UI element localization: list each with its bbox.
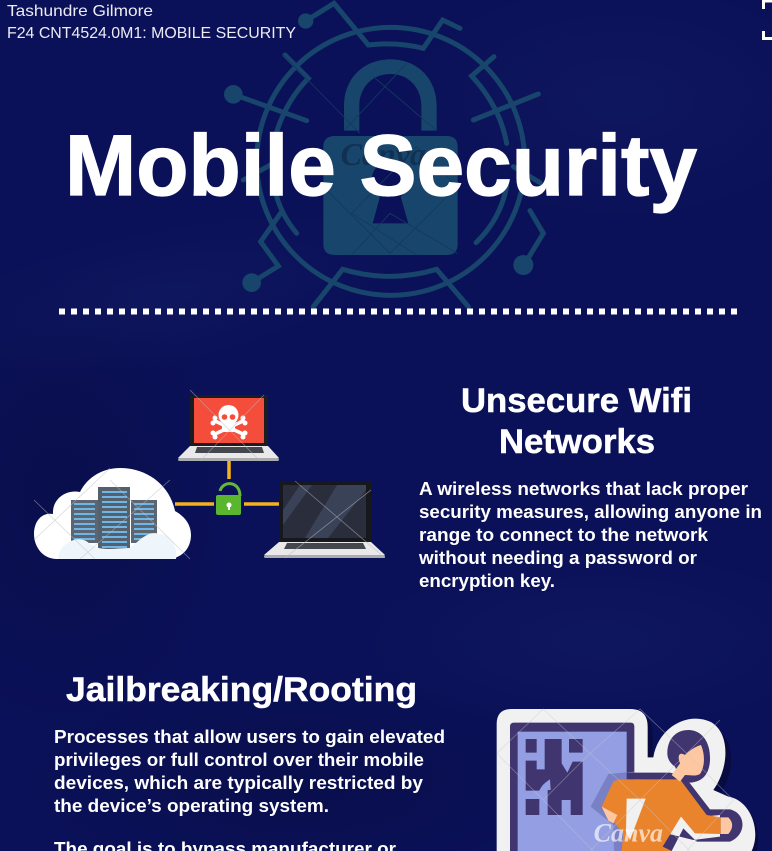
- heading: [461, 382, 692, 461]
- description: security measures, allowing anyone in: [419, 502, 762, 522]
- emblem circuit lines: [233, 3, 543, 307]
- title: Mobile Security: [65, 118, 697, 214]
- network illustration: [34, 390, 385, 559]
- paper in hand: [626, 799, 646, 840]
- watermark: Canva: Canva: [594, 819, 663, 848]
- jailbreak sticker illustration: [497, 709, 758, 851]
- person hand and arm: [602, 807, 732, 834]
- author and course header: [7, 3, 296, 42]
- person outline: [627, 773, 742, 851]
- door frame: [510, 723, 634, 851]
- infected laptop: [178, 395, 279, 461]
- emblem node dots: [224, 13, 533, 292]
- sticker outline: [497, 709, 755, 851]
- description: Processes that allow users to gain elevated: [54, 727, 445, 747]
- person face and neck: [672, 745, 704, 782]
- watermark lines: [34, 390, 385, 559]
- cloud with servers: [34, 468, 191, 559]
- person shadow on door: [591, 772, 634, 851]
- watermark lines: [283, 55, 457, 255]
- author and course header: Tashundre Gilmore: [7, 3, 153, 20]
- description: the device’s operating system.: [54, 796, 329, 816]
- person torso: [602, 779, 721, 851]
- door panel: [518, 732, 627, 851]
- watermark: Canva: Canva: [341, 136, 426, 172]
- padlock icon: [323, 59, 458, 255]
- description: range to connect to the network: [419, 525, 709, 545]
- heading: Unsecure Wifi: [461, 382, 692, 420]
- door pattern: [526, 739, 583, 815]
- padlock circuit emblem: [224, 3, 543, 307]
- description: without needing a password or: [418, 548, 697, 568]
- person hair: [667, 730, 710, 783]
- heading: Networks: [499, 423, 655, 461]
- section: jailbreaking and rooting: [54, 671, 445, 851]
- sticker shadow: [502, 714, 758, 851]
- description: encryption key.: [419, 571, 555, 591]
- description: A wireless networks that lack proper: [419, 479, 748, 499]
- heading: Jailbreaking/Rooting: [66, 671, 417, 709]
- connector lines: [175, 461, 279, 504]
- corner crop bracket: [762, 0, 772, 40]
- description: privileges or full control over their mobile: [54, 750, 424, 770]
- description: devices, which are typically restricted by: [54, 773, 423, 793]
- dark laptop: [264, 481, 385, 558]
- dotted divider: [59, 308, 738, 314]
- author and course header: F24 CNT4524.0M1: MOBILE SECURITY: [7, 25, 296, 42]
- watermark lines: [497, 709, 733, 851]
- description: [54, 727, 445, 851]
- open padlock: [216, 484, 241, 515]
- section: unsecure wifi networks: [418, 382, 762, 591]
- description: [418, 479, 762, 591]
- skull and crossbones: [210, 405, 248, 440]
